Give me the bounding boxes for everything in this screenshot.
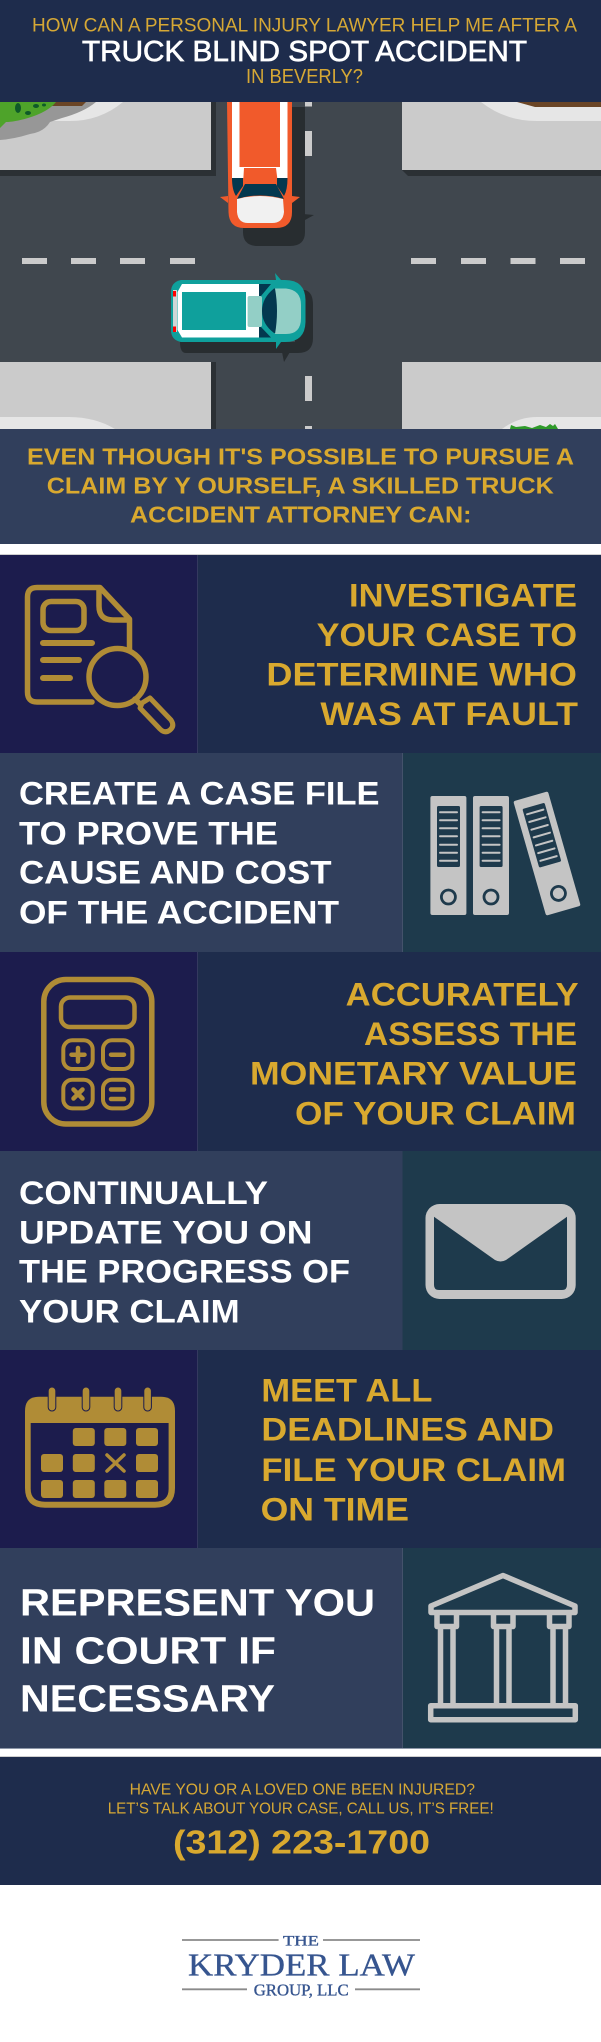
icon: calculator [44, 980, 152, 1124]
logo: The Kryder Law Group: GROUP, LLC [254, 1981, 349, 2000]
row 6 text: REPRESENT YOU [20, 1583, 375, 1625]
row 2 text: OF THE ACCIDENT [19, 894, 339, 930]
row 2 text: TO PROVE THE [19, 815, 278, 851]
row 3 text [250, 977, 579, 1131]
sidewalk: bottom left [0, 362, 211, 429]
intro banner: EVEN THOUGH IT'S POSSIBLE TO PURSUE A [27, 444, 574, 470]
row 2 text: CAUSE AND COST [19, 854, 332, 890]
row 6 text: NECESSARY [20, 1679, 275, 1721]
sidewalk: top left [0, 102, 211, 170]
sidewalk: bottom right [402, 362, 601, 429]
icon: binders [430, 791, 581, 916]
row 6 text: IN COURT IF [20, 1631, 276, 1673]
teal van [171, 273, 313, 362]
row 5 text: ON TIME [261, 1492, 409, 1528]
intro banner: ACCIDENT ATTORNEY CAN: [130, 502, 472, 528]
logo: The Kryder Law Group: THE [283, 1934, 319, 1950]
row 1 text: INVESTIGATE [349, 578, 577, 614]
row 5 text: DEADLINES AND [261, 1412, 554, 1448]
row 5 text: FILE YOUR CLAIM [261, 1452, 566, 1488]
row 1 text: WAS AT FAULT [320, 696, 578, 732]
row 1: investigate [0, 555, 601, 753]
row 3 text: MONETARY VALUE [250, 1056, 577, 1092]
row 3 text: ACCURATELY [346, 977, 579, 1013]
row 5: deadlines [0, 1350, 601, 1548]
logo: The Kryder Law Group [182, 1934, 420, 2000]
lane dashes [22, 102, 585, 429]
row 1 text [266, 578, 578, 732]
title line 3: IN BEVERLY? [246, 66, 363, 88]
title line 2: TRUCK BLIND SPOT ACCIDENT [82, 36, 527, 68]
row 1 text: DETERMINE WHO [266, 656, 577, 692]
row 2 text: CREATE A CASE FILE [19, 775, 380, 811]
title header [0, 0, 601, 102]
row 2 text [19, 775, 380, 930]
row 3 text: OF YOUR CLAIM [295, 1095, 576, 1131]
orange truck [220, 102, 314, 246]
row 6: court [0, 1548, 601, 1748]
road scene illustration [0, 102, 601, 429]
icon: calendar [25, 1387, 175, 1508]
title line 1: HOW CAN A PERSONAL INJURY LAWYER HELP ME AFTER A [32, 15, 577, 36]
icon: envelope [426, 1204, 576, 1299]
row 4 text [19, 1175, 350, 1329]
row 4 text: THE PROGRESS OF [19, 1254, 350, 1290]
row 5 text: MEET ALL [261, 1373, 432, 1409]
row 4 text: UPDATE YOU ON [19, 1214, 312, 1250]
icon: courthouse [431, 1576, 575, 1720]
shadows of sidewalk blocks [0, 102, 216, 176]
sidewalk: top right [402, 102, 601, 170]
row 2: case file [0, 753, 601, 952]
row 1 text: YOUR CASE TO [317, 617, 577, 653]
intro banner [0, 429, 601, 544]
row 3 text: ASSESS THE [364, 1016, 577, 1052]
row 4 text: YOUR CLAIM [19, 1293, 240, 1329]
footer call to action: HAVE YOU OR A LOVED ONE BEEN INJURED? [130, 1781, 475, 1798]
logo: The Kryder Law Group: KRYDER LAW [188, 1947, 416, 1983]
row 3: monetary value [0, 952, 601, 1151]
row 4 text: CONTINUALLY [19, 1175, 268, 1211]
icon: document and magnifying glass [28, 588, 173, 732]
row 5 text [261, 1373, 566, 1528]
phone number: (312) 223-1700 [173, 1824, 430, 1861]
footer call to action: LET’S TALK ABOUT YOUR CASE, CALL US, IT’S FREE! [108, 1800, 494, 1817]
row 6 text [20, 1583, 375, 1721]
intro banner: CLAIM BY Y OURSELF, A SKILLED TRUCK [47, 473, 554, 499]
footer call to action [0, 1757, 601, 1885]
row 4: progress updates [0, 1151, 601, 1350]
